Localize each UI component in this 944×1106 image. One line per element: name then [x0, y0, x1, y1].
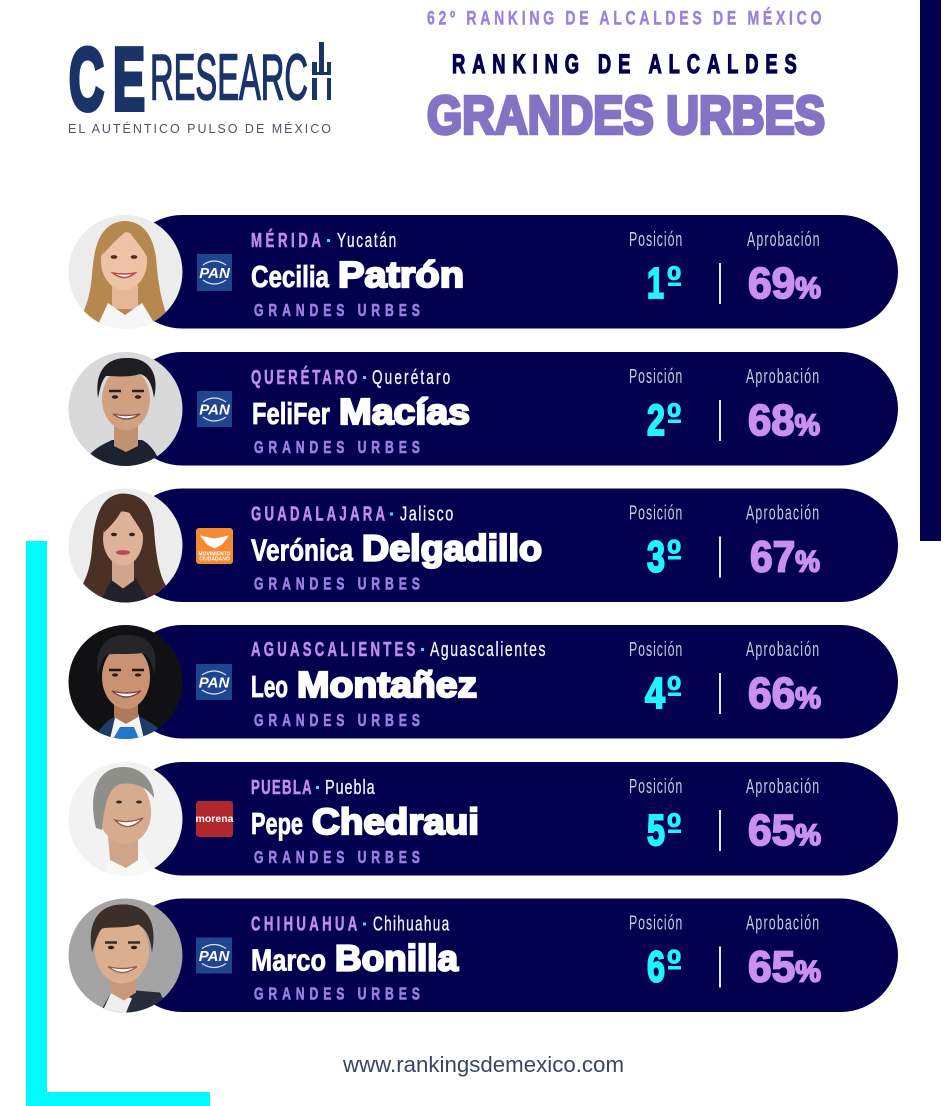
position: Posición — [629, 911, 682, 934]
right navy bar — [920, 0, 941, 541]
party logo: Movimiento Ciudadano: MOVIMIENTO — [198, 552, 231, 558]
header: grandes urbes: GRANDES URBES — [427, 86, 825, 146]
position: 4 — [645, 669, 665, 718]
city and state — [251, 366, 450, 389]
category: GRANDES URBES — [254, 438, 420, 458]
name — [252, 391, 470, 432]
position — [629, 365, 682, 445]
position — [629, 638, 682, 718]
party logo: PAN — [197, 254, 232, 291]
pill background — [125, 762, 898, 876]
party logo: Morena — [196, 801, 234, 837]
approval — [746, 911, 821, 992]
city and state: PUEBLA — [251, 776, 312, 799]
position: Posición — [629, 365, 682, 388]
approval: 65% — [748, 806, 821, 855]
city and state: MÉRIDA — [251, 229, 321, 252]
party logo: Morena: morena — [196, 813, 234, 825]
row 3: Verónica Delgadillo — [68, 488, 898, 602]
approval: 66% — [748, 669, 821, 718]
approval — [746, 501, 820, 582]
pill background — [125, 488, 898, 602]
city and state — [251, 502, 453, 525]
category: GRANDES URBES — [254, 711, 420, 731]
portrait — [68, 762, 184, 876]
cyan L-shaped bar — [26, 541, 210, 1106]
position: 2 — [647, 396, 665, 445]
pill background — [125, 898, 898, 1012]
city and state — [251, 637, 546, 661]
position: Posición — [629, 638, 682, 661]
portrait — [68, 488, 184, 602]
city and state — [251, 913, 450, 935]
name: Cecilia — [251, 259, 330, 294]
party logo: PAN: PAN — [199, 948, 230, 965]
approval: 69% — [748, 259, 821, 308]
portrait — [68, 352, 184, 466]
approval — [746, 365, 820, 445]
city and state: Chihuahua — [373, 913, 450, 935]
name — [251, 801, 479, 842]
divider — [719, 946, 721, 988]
approval: Aprobación — [746, 775, 819, 798]
name: Delgadillo — [362, 528, 542, 568]
name: Bonilla — [335, 938, 459, 978]
row 2: FeliFer Macías — [68, 352, 898, 466]
position: Posición — [629, 228, 682, 251]
approval — [746, 638, 821, 718]
name: Macías — [339, 391, 470, 432]
footer url: www.rankingsdemexico.com — [342, 1052, 624, 1077]
position — [629, 228, 682, 308]
logo: CE Research — [68, 30, 331, 136]
category: GRANDES URBES — [254, 574, 420, 594]
party logo: PAN: PAN — [199, 674, 230, 692]
name: FeliFer — [252, 396, 330, 431]
party logo: PAN: PAN — [199, 265, 231, 282]
city and state: Puebla — [325, 776, 375, 799]
name: Leo — [251, 669, 288, 704]
party logo: PAN: PAN — [199, 402, 231, 418]
name: Montañez — [297, 664, 477, 705]
name — [251, 528, 542, 568]
position: Posición — [629, 501, 682, 524]
city and state: GUADALAJARA — [251, 503, 385, 525]
name — [251, 254, 464, 295]
position: º — [667, 260, 681, 304]
divider — [719, 536, 721, 578]
category: GRANDES URBES — [254, 848, 420, 868]
category: GRANDES URBES — [254, 301, 420, 321]
divider — [719, 400, 721, 441]
position: º — [667, 806, 681, 850]
position: º — [667, 943, 681, 987]
header: edition line: 62º RANKING DE ALCALDES DE MÉXICO — [427, 7, 821, 29]
party logo: PAN — [196, 938, 232, 974]
name: Marco — [251, 942, 326, 978]
pill background — [125, 352, 898, 466]
portrait — [68, 898, 184, 1012]
city and state: Yucatán — [337, 229, 396, 252]
city and state: Aguascalientes — [430, 637, 545, 661]
approval: Aprobación — [746, 501, 819, 524]
approval: Aprobación — [746, 365, 819, 388]
position — [629, 501, 682, 582]
city and state: Jalisco — [400, 502, 453, 525]
pill background — [125, 625, 898, 738]
approval: 68% — [748, 396, 820, 445]
logo: CE Research: EL AUTÉNTICO PULSO DE MÉXICO — [68, 121, 331, 136]
divider — [719, 673, 721, 714]
position — [629, 911, 682, 992]
logo: CE Research: RESEARC — [150, 40, 308, 114]
approval: 65% — [748, 942, 821, 992]
position: 6 — [647, 942, 665, 992]
position: Posición — [629, 775, 682, 798]
divider — [719, 810, 721, 851]
approval — [747, 228, 821, 308]
row 1: Cecilia Patrón — [68, 215, 898, 329]
row 5: Pepe Chedraui — [68, 762, 898, 876]
position: º — [667, 670, 681, 714]
name: Verónica — [251, 532, 354, 568]
position: 5 — [647, 806, 665, 855]
approval: Aprobación — [746, 638, 819, 661]
row 4: Leo Montañez — [68, 625, 898, 739]
position: º — [667, 396, 681, 440]
city and state — [251, 776, 375, 799]
party logo: PAN — [196, 664, 232, 700]
city and state — [251, 229, 396, 252]
approval: Aprobación — [747, 228, 820, 251]
party logo: Movimiento Ciudadano: CIUDADANO — [199, 556, 230, 562]
party logo: PAN — [197, 391, 232, 427]
logo: CE Research: E — [113, 30, 145, 128]
city and state: CHIHUAHUA — [251, 913, 357, 935]
city and state: Querétaro — [372, 366, 450, 389]
portrait — [68, 215, 184, 329]
city and state: AGUASCALIENTES — [251, 638, 415, 661]
portrait — [68, 625, 184, 739]
logo: CE Research: C — [69, 30, 104, 128]
approval: Aprobación — [746, 911, 819, 934]
approval: 67% — [750, 532, 820, 582]
row 6: Marco Bonilla — [68, 898, 898, 1012]
header: ranking title: RANKING DE ALCALDES — [452, 48, 797, 79]
approval — [746, 775, 821, 855]
position: º — [667, 533, 681, 577]
position: 3 — [647, 532, 665, 582]
party logo: Movimiento Ciudadano — [196, 528, 233, 564]
city and state: QUERÉTARO — [251, 366, 357, 389]
position: 1 — [647, 259, 664, 308]
name: Patrón — [338, 254, 464, 295]
divider — [719, 263, 721, 304]
name: Pepe — [251, 806, 303, 841]
position — [629, 775, 682, 855]
name — [251, 938, 459, 978]
name: Chedraui — [312, 801, 479, 842]
category: GRANDES URBES — [254, 984, 420, 1004]
pill background — [125, 215, 898, 328]
